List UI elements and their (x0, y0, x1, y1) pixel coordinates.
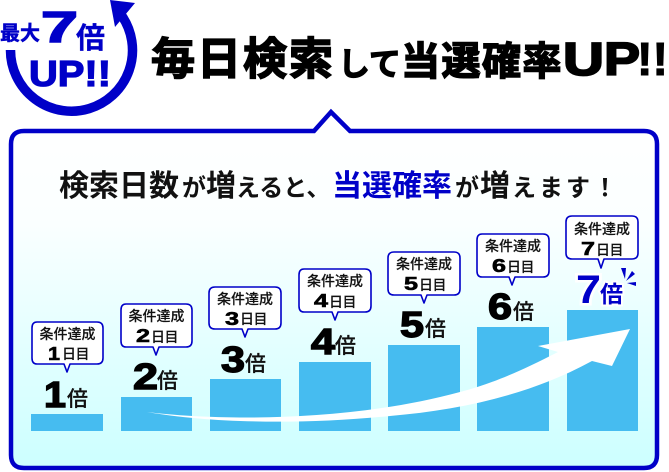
subheading: が (455, 174, 479, 202)
callout: day 4: 4 (314, 291, 328, 311)
title: !! (637, 33, 668, 85)
subheading: 当選確率 (332, 170, 452, 203)
callout: day 6: 日目 (507, 259, 534, 275)
callout: day 5 (388, 252, 460, 303)
label: 3x: 3 (221, 339, 245, 380)
label: 3x: 倍 (245, 353, 266, 376)
label: 1x: 1 (44, 374, 66, 415)
callout: day 1: 条件達成 (40, 326, 96, 342)
title (151, 33, 668, 85)
bar 1 (31, 414, 103, 431)
label: 1x: 倍 (67, 388, 88, 411)
callout: day 6: 6 (492, 256, 506, 276)
subheading: えます！ (512, 175, 620, 202)
title: 毎日検索 (151, 35, 335, 84)
bar 3 (210, 379, 281, 431)
title: して (338, 46, 401, 82)
title: 当選確率 (401, 41, 563, 84)
callout: day 5: 条件達成 (396, 256, 452, 272)
callout: day 7: 条件達成 (574, 221, 630, 237)
label: 7x highlighted (576, 268, 623, 312)
callout: day 5: 5 (404, 274, 418, 294)
callout: day 3: 3 (225, 309, 239, 329)
callout: day 3: 日目 (240, 311, 267, 327)
callout: day 4: 条件達成 (307, 273, 363, 289)
label: 7x highlighted: 7 (576, 268, 601, 312)
bar 4 (299, 362, 371, 431)
subheading: えると、 (236, 175, 330, 202)
callout: day 4: 日目 (329, 294, 356, 310)
bar 5 (388, 345, 460, 431)
badge text: 倍 (76, 22, 105, 55)
label: 6x: 倍 (513, 301, 534, 324)
callout: day 6 (477, 234, 549, 285)
callout: day 7: 7 (581, 239, 595, 259)
label: 4x (311, 321, 356, 362)
callout: day 2 (121, 304, 192, 355)
label: 4x: 倍 (335, 335, 356, 358)
icon: circular arrow (10, 0, 135, 111)
subheading: が (182, 174, 206, 202)
label: 5x: 5 (400, 304, 424, 345)
label: 6x (488, 286, 534, 327)
title: P (604, 33, 640, 85)
callout: day 4 (299, 269, 371, 320)
label: 5x: 倍 (425, 318, 446, 341)
callout: day 1: 1 (48, 344, 60, 364)
bar 6 (477, 327, 549, 431)
label: 6x: 6 (488, 286, 512, 327)
label: 2x: 倍 (157, 370, 178, 393)
icon: sparkle lines (621, 268, 636, 286)
callout: day 3: 条件達成 (217, 291, 273, 307)
badge text: UP!! (29, 53, 111, 94)
callout: day 3 (209, 287, 281, 337)
bar 7 (567, 310, 638, 431)
callout: day 2: 日目 (151, 329, 178, 345)
label: 2x (133, 356, 178, 397)
callout: day 2: 条件達成 (128, 308, 184, 324)
subheading: 検索日数 (59, 170, 179, 203)
callout: day 7 (566, 216, 638, 268)
badge text: 最大 (0, 22, 40, 45)
label: 3x (221, 339, 266, 380)
label: 4x: 4 (311, 321, 335, 362)
callout: day 6: 条件達成 (485, 238, 541, 254)
label: 5x (400, 304, 446, 345)
bar 2 (121, 397, 192, 431)
panel: speech-bubble frame (11, 112, 657, 468)
subheading: 増 (480, 170, 510, 203)
label: 1x (44, 374, 88, 415)
badge text (0, 3, 111, 94)
callout: day 1 (32, 322, 103, 372)
bar chart (31, 310, 638, 431)
label: 7x highlighted: 倍 (600, 281, 623, 307)
badge text: 7 (41, 3, 78, 52)
callout: day 5: 日目 (419, 277, 446, 293)
badge: up to 7 times UP (0, 0, 135, 111)
callout: day 7: 日目 (596, 242, 623, 258)
label: 2x: 2 (133, 356, 158, 397)
arrow: rising white curve (147, 329, 630, 422)
subheading: 増 (206, 170, 236, 203)
callout: day 2: 2 (136, 326, 150, 346)
callout: day 1: 日目 (62, 346, 89, 362)
title: U (563, 33, 604, 85)
